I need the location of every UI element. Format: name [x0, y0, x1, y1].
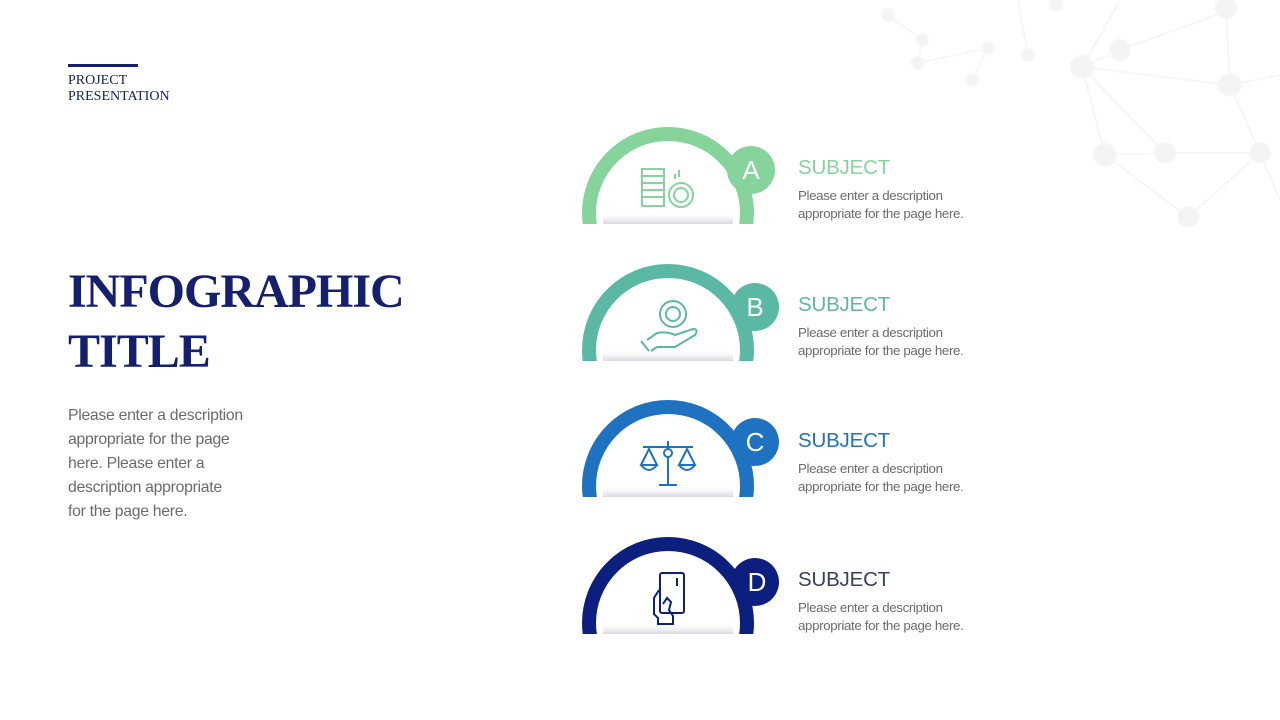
text B: Please enter a description — [798, 325, 943, 340]
text C: appropriate for the page here. — [798, 478, 963, 494]
text C — [798, 429, 963, 494]
item A: A — [742, 155, 760, 185]
header label: PROJECT — [68, 73, 127, 88]
intro text: appropriate for the page — [68, 431, 229, 448]
item D: D — [748, 567, 766, 597]
icon: coins — [642, 169, 693, 207]
text C: Please enter a description — [798, 461, 943, 476]
text A: appropriate for the page here. — [798, 206, 963, 220]
item D — [582, 537, 963, 634]
text D — [798, 568, 963, 632]
text C: SUBJECT — [798, 429, 890, 452]
item C — [582, 400, 963, 497]
item B: B — [746, 292, 764, 322]
text B: SUBJECT — [798, 293, 890, 316]
header label — [68, 64, 170, 104]
intro text: Please enter a description — [68, 407, 243, 424]
title — [68, 265, 404, 378]
item A — [582, 127, 963, 224]
text D: Please enter a description — [798, 600, 943, 615]
text A — [798, 156, 963, 220]
text D: appropriate for the page here. — [798, 618, 963, 632]
item B — [582, 264, 963, 361]
text B — [798, 293, 963, 358]
text D: SUBJECT — [798, 568, 890, 591]
icon: scales — [641, 441, 695, 485]
header label: PRESENTATION — [68, 89, 170, 104]
intro text: here. Please enter a — [68, 455, 204, 472]
intro text: description appropriate — [68, 479, 222, 496]
title: INFOGRAPHIC — [68, 265, 404, 318]
intro text: for the page here. — [68, 503, 187, 520]
icon: hand coin — [641, 301, 697, 351]
text A: SUBJECT — [798, 156, 890, 179]
background network pattern — [881, 0, 1280, 228]
text B: appropriate for the page here. — [798, 342, 963, 358]
item C: C — [746, 427, 764, 457]
icon: card in hand — [654, 573, 684, 624]
text A: Please enter a description — [798, 188, 943, 203]
intro text — [68, 407, 243, 520]
title: TITLE — [68, 325, 210, 378]
